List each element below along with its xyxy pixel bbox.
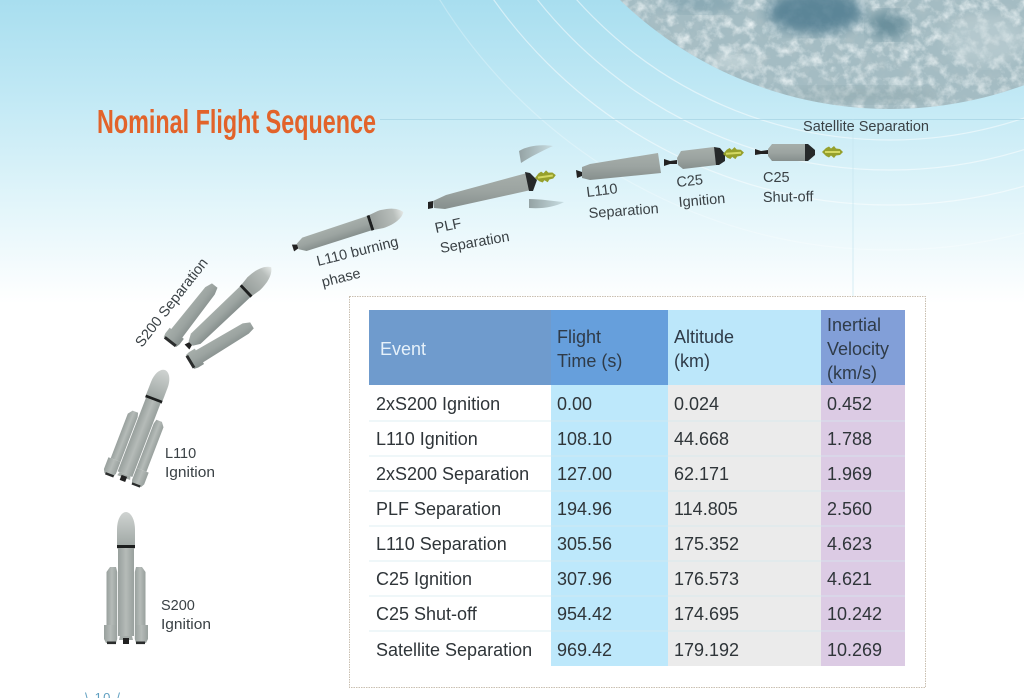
table header: Inertial: [827, 315, 881, 335]
table row: 2xS200 Separation: 62.171: [674, 464, 729, 484]
rocket: PLF separation: [428, 145, 564, 209]
table row: PLF Separation: PLF Separation: [376, 499, 501, 519]
label: S200 ignition: Ignition: [161, 617, 211, 633]
table row: Satellite Separation: 969.42: [557, 640, 612, 660]
table header: (km/s): [827, 363, 877, 383]
table row: C25 Ignition: 4.621: [827, 569, 872, 589]
rocket: S200 separation: [162, 261, 277, 370]
label: S200 separation: S200 Separation: [133, 255, 212, 350]
label: C25 ignition: Ignition: [678, 191, 726, 211]
label: PLF separation: [434, 216, 511, 257]
table row: L110 Separation: 4.623: [827, 534, 872, 554]
icon: separated satellite: [822, 146, 843, 158]
rocket: L110 burning phase: [290, 204, 406, 257]
label: C25 ignition: [676, 172, 726, 211]
rocket: L110 separation: [576, 153, 661, 180]
table: flight events: [369, 310, 905, 666]
table row: L110 Separation: [376, 534, 872, 554]
table row: C25 Ignition: 176.573: [674, 569, 739, 589]
label: satellite separation: Satellite Separation: [803, 119, 929, 135]
table row: L110 Ignition: 108.10: [557, 429, 612, 449]
title: Nominal Flight Sequence: [97, 103, 376, 140]
label: L110 burning phase: L110 burning: [315, 234, 400, 270]
label: C25 shut-off: Shut-off: [763, 189, 815, 206]
table row: PLF Separation: 2.560: [827, 499, 872, 519]
table header: Event: [380, 339, 426, 359]
table row: C25 Shut-off: C25 Shut-off: [376, 604, 478, 624]
rocket: C25 ignition: [664, 147, 744, 169]
table row: 2xS200 Ignition: 2xS200 Ignition: [376, 394, 500, 414]
table row: C25 Shut-off: 954.42: [557, 604, 612, 624]
label: S200 ignition: S200: [161, 598, 195, 614]
table row: L110 Separation: 175.352: [674, 534, 739, 554]
label: L110 ignition: Ignition: [165, 465, 215, 481]
table row: 2xS200 Separation: 2xS200 Separation: [376, 464, 529, 484]
guide lines: [380, 118, 1024, 120]
table row: 2xS200 Ignition: 0.024: [674, 394, 719, 414]
label: L110 separation: Separation: [588, 201, 659, 222]
panel: data table card: [350, 296, 926, 688]
label: L110 separation: [586, 181, 659, 222]
label: C25 shut-off: [763, 170, 815, 206]
table header: Altitude: [674, 327, 734, 347]
table header: Velocity: [827, 339, 889, 359]
table header: Time (s): [557, 351, 622, 371]
table row: 2xS200 Ignition: [376, 394, 872, 414]
label: PLF separation: Separation: [439, 229, 511, 257]
label: C25 shut-off: C25: [763, 170, 790, 186]
table row: L110 Ignition: [376, 429, 872, 449]
table column fills: [369, 385, 905, 666]
rocket: C25 shut-off: [755, 144, 815, 161]
label: PLF separation: PLF: [434, 216, 463, 237]
label: C25 ignition: C25: [676, 172, 704, 191]
table row: 2xS200 Ignition: 0.00: [557, 394, 592, 414]
table row: L110 Ignition: 44.668: [674, 429, 729, 449]
label: L110 ignition: L110: [165, 446, 196, 462]
background sky gradient: [0, 0, 1024, 330]
table row: C25 Ignition: C25 Ignition: [376, 569, 472, 589]
rocket: S200 ignition: [104, 512, 148, 644]
table row: 2xS200 Ignition: 0.452: [827, 394, 872, 414]
table row: 2xS200 Separation: 127.00: [557, 464, 612, 484]
table row: C25 Shut-off: 174.695: [674, 604, 739, 624]
label: L110 ignition: [165, 446, 215, 481]
moon: [600, 0, 1024, 115]
table row: L110 Separation: L110 Separation: [376, 534, 507, 554]
table row: C25 Shut-off: 10.242: [827, 604, 882, 624]
table row: Satellite Separation: [376, 640, 882, 660]
table row: Satellite Separation: 10.269: [827, 640, 882, 660]
label: L110 burning phase: phase: [320, 266, 362, 291]
table row: L110 Separation: 305.56: [557, 534, 612, 554]
rocket: L110 ignition: [102, 362, 185, 489]
table header: [369, 310, 905, 385]
table row: C25 Shut-off: [376, 604, 882, 624]
table row: Satellite Separation: 179.192: [674, 640, 739, 660]
table row: L110 Ignition: L110 Ignition: [376, 429, 478, 449]
label: S200 ignition: [161, 598, 211, 633]
table row: C25 Ignition: [376, 569, 872, 589]
table header: Flight: [557, 327, 601, 347]
label: L110 burning phase: [315, 234, 400, 291]
table row: L110 Ignition: 1.788: [827, 429, 872, 449]
table header: (km): [674, 351, 710, 371]
orbit rings: [360, 0, 1024, 250]
table row: PLF Separation: 114.805: [674, 499, 738, 519]
table row: PLF Separation: 194.96: [557, 499, 612, 519]
table row: Satellite Separation: Satellite Separation: [376, 640, 532, 660]
label: L110 separation: L110: [586, 181, 618, 201]
table row: PLF Separation: [376, 499, 872, 519]
table row: C25 Ignition: 307.96: [557, 569, 612, 589]
table row: 2xS200 Separation: [376, 464, 872, 484]
table row: 2xS200 Separation: 1.969: [827, 464, 872, 484]
